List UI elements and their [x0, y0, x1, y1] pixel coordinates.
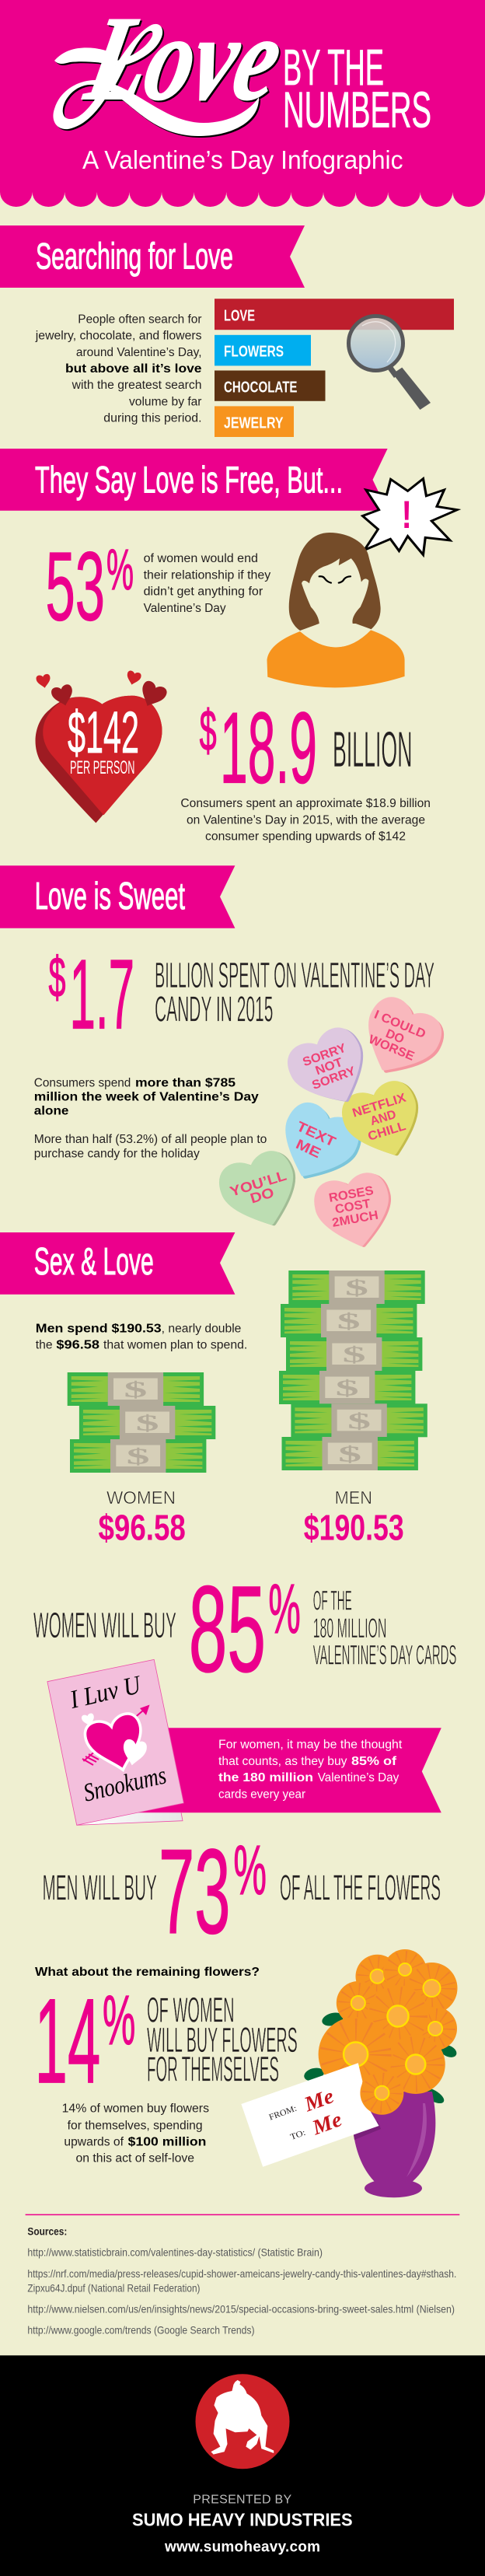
panel: sex and love	[0, 1232, 459, 2197]
title: by the: BY THE	[283, 39, 384, 96]
callout ribbon: thought that counts: For women, it may be the thought	[218, 1738, 403, 1751]
heading: remaining flowers: What about the remaining flowers?	[35, 1966, 260, 1979]
candy heart: roses cost 2much: COST	[334, 1197, 372, 1217]
ribbon: sex and love: Sex & Love	[34, 1240, 154, 1283]
text block: search intro: but above all it’s love	[65, 362, 202, 376]
bar: jewelry: JEWELRY	[224, 414, 284, 432]
stat: 53 percent: %	[106, 537, 134, 602]
flower over note	[360, 2071, 403, 2115]
candy heart: I could do worse: DO	[384, 1027, 406, 1047]
text block: men versus women	[36, 1322, 247, 1351]
text block: men versus women: the	[36, 1338, 53, 1351]
text block: self-love: on this act of self-love	[76, 2152, 194, 2165]
bar: flowers	[215, 335, 311, 365]
stat: 1.7 billion	[48, 939, 134, 1050]
bar: chocolate: CHOCOLATE	[224, 379, 297, 397]
panel: sex and love: FOR THEMSELVES	[147, 2050, 279, 2089]
text block: consumers spent: on Valentine’s Day in 2015, with the average	[187, 813, 425, 827]
stat: 18.9 billion: $	[200, 698, 217, 763]
text block: self-love: $100 million	[128, 2135, 206, 2148]
small hearts	[36, 670, 169, 711]
text block: men versus women: , nearly double	[162, 1322, 241, 1335]
ribbon: love is sweet: Love is Sweet	[35, 875, 185, 918]
stat: women buy 85 percent: WOMEN WILL BUY	[33, 1605, 176, 1645]
label: women amount: $96.58	[98, 1508, 186, 1548]
icon: bouquet in vase	[241, 1949, 459, 2197]
bar: chocolate	[215, 370, 325, 401]
text block: men versus women: that women plan to spend.	[103, 1338, 247, 1351]
panel: searching for love	[0, 225, 454, 437]
callout ribbon: thought that counts	[132, 1728, 441, 1812]
bar: love	[215, 299, 454, 330]
money stack: men: $	[338, 1442, 361, 1466]
sources: http://www.google.com/trends (Google Search Trends)	[27, 2324, 255, 2337]
footer: website: www.sumoheavy.com	[164, 2539, 320, 2556]
stat: women buy 85 percent	[33, 1561, 456, 1698]
money stack: women: $	[136, 1410, 159, 1435]
text block: 53 percent description: Valentine’s Day	[144, 602, 226, 615]
callout ribbon: thought that counts: the 180 million	[218, 1771, 313, 1784]
footer: presented by: PRESENTED BY	[193, 2493, 292, 2506]
candy hearts	[216, 993, 448, 1253]
candy heart: roses cost 2much: ROSES	[328, 1184, 375, 1205]
icon: speech burst	[362, 479, 457, 555]
gift note: Me	[309, 2107, 345, 2140]
icon: heart with hearts	[36, 670, 169, 823]
stat: women buy 85 percent: 180 MILLION	[313, 1613, 386, 1644]
stat: 14 percent: OF WOMEN	[147, 1991, 235, 2030]
divider line	[26, 2214, 459, 2215]
subtitle: A Valentine’s Day Infographic	[82, 145, 403, 174]
stat: women buy 85 percent: 85	[189, 1561, 266, 1698]
text block: 53 percent description	[144, 552, 270, 615]
label: men amount: $190.53	[304, 1508, 404, 1548]
candy heart: you'll do	[216, 1148, 307, 1236]
panel: sex and love: WILL BUY FLOWERS	[147, 2020, 298, 2060]
text block: men versus women: $96.58	[56, 1338, 99, 1351]
text block: consumers spent	[180, 797, 431, 843]
icon: valentine card: Snookums	[81, 1761, 169, 1808]
heading: candy spending: CANDY IN 2015	[155, 988, 273, 1029]
stat: 53 percent: 53	[45, 533, 105, 641]
label: women amount	[98, 1487, 186, 1548]
sources	[27, 2225, 456, 2337]
stat: men buy 73 percent: %	[233, 1832, 267, 1910]
gift note: TO:	[289, 2128, 307, 2142]
candy heart: netflix and chill: AND	[368, 1108, 398, 1128]
text block: self-love	[62, 2102, 209, 2165]
text block: search intro: around Valentine’s Day,	[76, 346, 202, 359]
stat: 14 percent: %	[103, 1982, 135, 2060]
text block: candy facts: purchase candy for the holiday	[34, 1147, 200, 1160]
stat: men buy 73 percent: MEN WILL BUY	[42, 1867, 157, 1907]
leaves	[302, 2011, 459, 2106]
heading: candy spending	[155, 955, 434, 1029]
candy heart: netflix and chill: NETFLIX	[351, 1092, 408, 1120]
icon: magnifying glass	[348, 316, 431, 410]
candy heart: sorry not sorry	[284, 1024, 379, 1116]
stat: 14 percent: 14	[35, 1973, 100, 2108]
stat: 1.7 billion: $	[48, 946, 65, 1009]
icon: valentine card: I Luv U	[67, 1671, 145, 1714]
callout ribbon: thought that counts: 85% of	[351, 1755, 397, 1768]
label: women amount: WOMEN	[106, 1487, 176, 1508]
candy heart: text me: TEXT	[295, 1118, 338, 1150]
candy heart: I could do worse: I COULD	[372, 1008, 427, 1041]
money stack: men	[279, 1271, 427, 1470]
text block: candy facts: more than $785	[135, 1076, 236, 1089]
panel: love is sweet: 1.7	[70, 939, 134, 1050]
candy heart: text me	[271, 1099, 365, 1191]
money stack: men: $	[343, 1342, 366, 1367]
text block: search intro: with the greatest search	[72, 379, 202, 392]
sources: http://www.statisticbrain.com/valentines-day-statistics/ (Statistic Brain)	[27, 2246, 323, 2259]
text block: 53 percent description: of women would end	[144, 552, 258, 565]
flowers	[319, 1949, 457, 2094]
stat: 18.9 billion: 18.9	[220, 690, 317, 804]
bar: flowers: FLOWERS	[224, 344, 284, 361]
text block: search intro: volume by far	[129, 396, 202, 409]
text block: candy facts	[34, 1076, 267, 1160]
text block: consumers spent: Consumers spent an approximate $18.9 billion	[180, 797, 431, 810]
heart caption: PER PERSON	[70, 757, 135, 778]
money stack: men: $	[347, 1409, 371, 1434]
icon: valentine card	[47, 1659, 183, 1825]
money stack: women	[68, 1372, 215, 1473]
candy heart: roses cost 2much: 2MUCH	[331, 1209, 379, 1230]
gift note: FROM:	[268, 2104, 298, 2123]
panel: love is sweet	[0, 865, 448, 1253]
text block: candy facts: million the week of Valentine’s Day	[34, 1091, 259, 1104]
icon: angry woman	[267, 533, 405, 687]
text block: self-love: for themselves, spending	[68, 2119, 203, 2132]
callout ribbon: thought that counts: cards every year	[218, 1788, 305, 1801]
footer	[0, 2355, 485, 2576]
stat: 14 percent	[35, 1973, 298, 2108]
candy heart: sorry not sorry: SORRY	[310, 1064, 358, 1092]
callout ribbon: thought that counts: Valentine’s Day	[318, 1771, 400, 1784]
text block: self-love: upwards of	[64, 2135, 124, 2148]
sources: Zipxu64J.dpuf (National Retail Federation)	[27, 2281, 201, 2294]
panel: they say love is free	[0, 449, 457, 843]
money stack: women: $	[124, 1378, 147, 1403]
text block: self-love: 14% of women buy flowers	[62, 2102, 209, 2116]
money stack: men: $	[336, 1376, 359, 1401]
candy heart: roses cost 2much	[312, 1172, 398, 1253]
logo: sumo wrestler	[196, 2374, 289, 2469]
heart amount: $142	[68, 700, 139, 766]
sources: Sources:	[27, 2225, 67, 2237]
candy heart: you'll do: YOU’LL	[228, 1168, 288, 1200]
label: men amount: MEN	[335, 1487, 372, 1508]
vase	[352, 2092, 435, 2197]
stat: men buy 73 percent: 73	[159, 1824, 230, 1959]
gift note	[241, 2063, 379, 2167]
money stack: women: $	[127, 1445, 150, 1470]
money stack: men: $	[345, 1275, 368, 1300]
text block: candy facts: Consumers spend	[34, 1076, 131, 1089]
text block: search intro: People often search for	[78, 313, 202, 327]
title: Love wordmark	[53, 0, 293, 136]
bar: jewelry	[215, 406, 294, 437]
icon: speech burst: !	[401, 493, 412, 537]
ribbon: sex and love	[0, 1232, 235, 1295]
text block: search intro	[35, 313, 202, 425]
ribbon: searching for love: Searching for Love	[36, 236, 233, 277]
stat: women buy 85 percent: OF THE	[313, 1586, 352, 1617]
bar: love: LOVE	[224, 308, 255, 325]
text block: 53 percent description: their relationship if they	[144, 568, 270, 582]
ribbon: they say love is free	[0, 449, 388, 511]
label: men amount	[304, 1487, 404, 1548]
candy heart: I could do worse	[353, 993, 448, 1087]
callout ribbon: thought that counts: that counts, as they buy	[218, 1755, 347, 1768]
text block: 53 percent description: didn’t get anything for	[144, 585, 263, 599]
gift note: Me	[300, 2084, 337, 2116]
footer: company name: SUMO HEAVY INDUSTRIES	[132, 2509, 353, 2529]
text block: search intro: during this period.	[103, 412, 202, 425]
ribbon: searching for love	[0, 225, 305, 288]
candy heart: I could do worse: WORSE	[367, 1033, 417, 1064]
text block: consumers spent: consumer spending upwards of $142	[205, 830, 406, 843]
money stack: men: $	[337, 1309, 361, 1334]
candy heart: you'll do: DO	[248, 1184, 276, 1207]
text block: candy facts: alone	[34, 1105, 69, 1118]
big heart	[36, 696, 162, 823]
stat: women buy 85 percent: %	[268, 1571, 301, 1648]
candy heart: sorry not sorry: SORRY	[301, 1041, 348, 1069]
text block: search intro: jewelry, chocolate, and flowers	[35, 330, 202, 343]
candy heart: sorry not sorry: NOT	[314, 1056, 345, 1078]
header banner	[0, 0, 485, 207]
candy heart: netflix and chill: CHILL	[366, 1120, 407, 1144]
candy heart: text me: ME	[294, 1136, 323, 1161]
text block: men versus women: Men spend $190.53	[36, 1322, 162, 1335]
text block: candy facts: More than half (53.2%) of all people plan to	[34, 1133, 267, 1146]
stat: men buy 73 percent	[42, 1824, 441, 1959]
ribbon: love is sweet	[0, 865, 235, 928]
candy heart: netflix and chill	[339, 1078, 430, 1166]
bar chart: search terms	[215, 299, 454, 437]
